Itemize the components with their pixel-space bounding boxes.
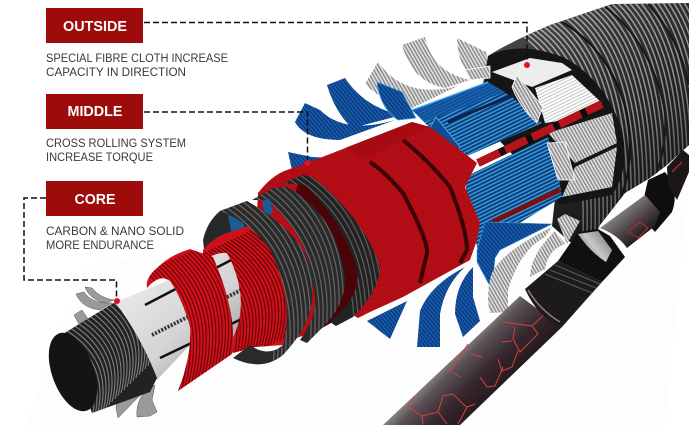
text: core description: CARBON & NANO SOLID <box>46 226 184 238</box>
core end flaps <box>74 287 157 418</box>
dark ring three <box>283 175 380 326</box>
cylinder interior <box>480 48 624 205</box>
faint backdrop <box>25 180 689 427</box>
text: outside description: CAPACITY IN DIRECTION <box>46 67 186 79</box>
lower blue and gray flaps <box>367 214 580 347</box>
core cylinder <box>48 302 157 413</box>
leader line: core <box>24 198 120 304</box>
rod upper section <box>600 150 689 248</box>
panel: middle <box>46 94 186 164</box>
blue block <box>412 82 562 290</box>
text: middle description: CROSS ROLLING SYSTEM <box>46 138 186 150</box>
white inner strips <box>492 58 617 197</box>
small silver flaps <box>465 66 575 180</box>
rod lower <box>383 296 562 425</box>
leader line: middle <box>144 112 310 166</box>
dark ring one <box>220 201 312 364</box>
rod threaded joint <box>525 261 602 327</box>
rod ferrule <box>558 229 625 282</box>
label: outside <box>46 8 143 43</box>
outer gray cylinder <box>470 0 689 245</box>
label: core: CORE <box>74 192 116 208</box>
red gap between rings one and two <box>262 186 330 342</box>
red band one <box>146 249 234 391</box>
label: outside: OUTSIDE <box>63 19 127 35</box>
gray flaps upper <box>365 37 490 108</box>
blue upper flaps <box>288 78 416 178</box>
silver core section <box>116 240 262 380</box>
red band two <box>203 226 287 353</box>
panel: core <box>46 181 184 252</box>
text: core description: MORE ENDURANCE <box>46 240 154 252</box>
panel: outside <box>46 8 228 79</box>
ring one back lip <box>203 199 273 258</box>
text: outside description: SPECIAL FIBRE CLOTH INCREASE <box>46 53 228 65</box>
red main cylinder <box>250 122 480 345</box>
dark ring two <box>252 187 345 343</box>
red hexagon pattern <box>408 311 553 424</box>
text: middle description: INCREASE TORQUE <box>46 152 153 164</box>
leader line: outside <box>144 22 530 68</box>
label: middle: MIDDLE <box>68 104 123 120</box>
red segmented strip <box>478 104 602 163</box>
